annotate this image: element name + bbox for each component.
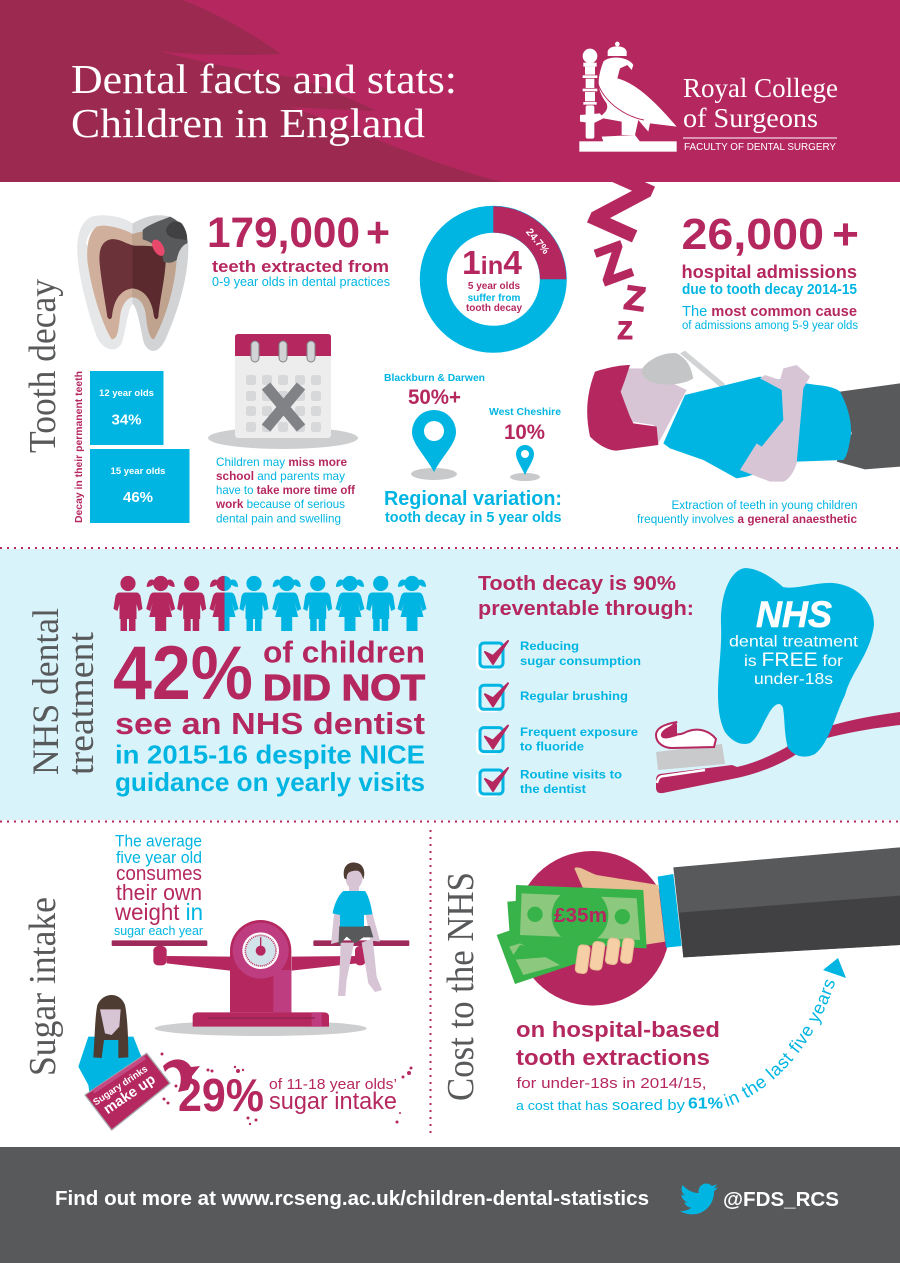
chart: donut 1 in 4: 24.7% bbox=[523, 226, 552, 257]
title: Dental facts and stats: bbox=[71, 56, 457, 102]
stat: 42% did not see an NHS dentist: 42% bbox=[113, 631, 253, 716]
heading: tooth decay: Tooth decay bbox=[22, 279, 64, 453]
list: prevention checklist: Regular brushing bbox=[520, 689, 628, 703]
list: prevention checklist: Frequent exposure bbox=[520, 725, 638, 739]
stat: 42% did not see an NHS dentist bbox=[113, 631, 425, 797]
stat: 29% of sugar intake bbox=[178, 1069, 397, 1121]
list: prevention checklist: the dentist bbox=[520, 782, 586, 796]
text: own weight in sugar: The average bbox=[115, 832, 202, 850]
stat: 26,000+ hospital admissions: due to tooth decay 2014-15 bbox=[682, 282, 857, 298]
heading: cost to the NHS: Cost to the NHS bbox=[440, 872, 482, 1101]
chart: donut 1 in 4 bbox=[433, 206, 566, 339]
curved text: cost soared by 61%: 61% bbox=[688, 1096, 723, 1112]
decoration: sleeping Zs: Z bbox=[622, 279, 648, 319]
chart: decay bars by age bbox=[74, 371, 190, 523]
chart: decay bars by age: 15 year olds bbox=[111, 466, 165, 477]
heading: sugar intake: Sugar intake bbox=[22, 897, 64, 1076]
stat: 42% did not see an NHS dentist: guidance on yearly visits bbox=[115, 767, 425, 797]
stat: 26,000+ hospital admissions: hospital admissions bbox=[682, 262, 857, 282]
heading: 90% preventable: Tooth decay is 90% bbox=[478, 573, 676, 595]
chart: decay bars by age: 46% bbox=[123, 489, 153, 506]
list: prevention checklist: sugar consumption bbox=[520, 654, 641, 668]
stat: 179,000+ teeth extracted: + bbox=[366, 209, 390, 257]
logo: Royal College of Surgeons crest: Royal College bbox=[683, 73, 838, 103]
text: children miss school: dental pain and swelling bbox=[216, 512, 341, 526]
text: own weight in sugar: sugar each year bbox=[114, 923, 204, 938]
illustration: weighing scale bbox=[112, 920, 409, 1036]
stat: 29% of sugar intake: 29% bbox=[178, 1069, 264, 1121]
stat: 42% did not see an NHS dentist: in 2015-16 despite NICE bbox=[115, 740, 425, 770]
caption: general anaesthetic bbox=[637, 500, 858, 526]
heading: NHS dental treatment bbox=[26, 608, 102, 775]
curved text: cost soared by 61%: in the last five years bbox=[724, 980, 835, 1107]
callout: NHS treatment free tooth: dental treatment bbox=[729, 634, 859, 650]
stat: 29% of sugar intake: of 11-18 year olds’ bbox=[269, 1077, 397, 1093]
stat: 26,000+ hospital admissions: of admissions among 5-9 year olds bbox=[682, 320, 858, 332]
stat: 179,000+ teeth extracted bbox=[207, 209, 390, 289]
chart: donut 1 in 4: tooth decay bbox=[466, 303, 522, 314]
callout: NHS treatment free tooth bbox=[718, 568, 874, 757]
text: own weight in sugar: consumes bbox=[116, 863, 202, 885]
list: prevention checklist: Routine visits to bbox=[520, 768, 622, 782]
text: children miss school bbox=[215, 455, 355, 526]
callout: NHS treatment free tooth: under-18s bbox=[754, 671, 833, 688]
decoration: sleeping Zs: Z bbox=[588, 231, 638, 297]
text: children miss school: school and parents may bbox=[216, 469, 345, 483]
icon: toothbrush bbox=[656, 712, 900, 793]
decoration: liquid splash and bubbles bbox=[160, 1052, 412, 1125]
chart: regional variation pins bbox=[384, 372, 562, 526]
panel: sugar intake section bbox=[22, 832, 412, 1130]
chart: regional variation pins: Blackburn & Darwen bbox=[384, 372, 485, 384]
caption: general anaesthetic: Extraction of teeth in young children bbox=[672, 500, 858, 512]
chart: regional variation pins: 10% bbox=[504, 421, 545, 444]
chart: regional variation pins: tooth decay in 5 year olds bbox=[385, 510, 562, 526]
stat: 26,000+ hospital admissions bbox=[682, 210, 859, 332]
text: find out more: Find out more at www.rcseng.ac.uk/children-dental-statistics bbox=[55, 1188, 649, 1210]
list: prevention checklist bbox=[476, 639, 641, 797]
text: children miss school: work because of serious bbox=[215, 497, 345, 511]
chart: regional variation pins: Regional variation: bbox=[384, 488, 562, 510]
list: prevention checklist: to fluoride bbox=[520, 740, 584, 754]
icon: twitter bird bbox=[680, 1184, 718, 1214]
stat: 42% did not see an NHS dentist: of children bbox=[263, 634, 425, 670]
decoration: sleeping Zs: Z bbox=[617, 317, 633, 345]
illustration: seated boy bbox=[331, 863, 382, 996]
stat: 42% did not see an NHS dentist: see an NHS dentist bbox=[115, 707, 425, 741]
heading: NHS dental treatment: treatment bbox=[61, 631, 102, 775]
text: children miss school: Children may miss more bbox=[216, 455, 347, 469]
logo: Royal College of Surgeons crest bbox=[579, 42, 838, 164]
text: own weight in sugar bbox=[114, 832, 204, 938]
panel: footer bbox=[0, 1147, 900, 1263]
label: £35m: £35m bbox=[554, 905, 607, 927]
text: own weight in sugar: their own bbox=[116, 880, 202, 905]
curved text: cost soared by 61%: soared by bbox=[612, 1098, 686, 1114]
chart: regional variation pins: West Cheshire bbox=[489, 407, 561, 418]
title: Children in England bbox=[71, 100, 425, 146]
text: hospital-based tooth extractions bbox=[516, 1017, 720, 1092]
title bbox=[71, 56, 457, 146]
list: prevention checklist: Reducing bbox=[520, 639, 579, 653]
chart: ten children pictogram bbox=[114, 576, 426, 631]
stat: 29% of sugar intake: sugar intake bbox=[269, 1088, 397, 1115]
label: sugary drinks make up: make up bbox=[101, 1072, 159, 1118]
chart: decay bars by age: Decay in their permanent teeth bbox=[74, 371, 85, 523]
curved text: cost soared by 61%: a cost that has bbox=[516, 1099, 608, 1113]
chart: regional variation pins: 50%+ bbox=[408, 386, 461, 409]
illustration: anaesthetised patient bbox=[587, 351, 900, 482]
chart: decay bars by age: 12 year olds bbox=[99, 388, 154, 399]
chart: donut 1 in 4: 1in4 bbox=[462, 244, 523, 281]
illustration: hand with £35m banknotes bbox=[497, 847, 900, 1006]
arrow: upward trend bbox=[823, 958, 846, 978]
heading: 90% preventable: preventable through: bbox=[478, 598, 694, 620]
illustration: girl with sugary drink can bbox=[78, 995, 170, 1130]
chart: donut 1 in 4: 5 year olds bbox=[468, 281, 521, 292]
stat: 26,000+ hospital admissions: 26,000 bbox=[682, 210, 824, 259]
stat: 26,000+ hospital admissions: The most common cause bbox=[682, 304, 857, 320]
panel: header bbox=[0, 0, 900, 182]
callout: NHS treatment free tooth: is FREE for bbox=[744, 650, 843, 671]
icon: calendar with cross bbox=[208, 334, 358, 449]
panel: cost to the NHS section bbox=[440, 847, 900, 1114]
stat: 179,000+ teeth extracted: 0-9 year olds in dental practices bbox=[212, 275, 390, 289]
text: twitter handle: @FDS_RCS bbox=[723, 1189, 839, 1211]
text: own weight in sugar: five year old bbox=[116, 848, 202, 867]
chart: decay bars by age: 34% bbox=[111, 412, 142, 428]
text: hospital-based tooth extractions: tooth extractions bbox=[516, 1045, 710, 1070]
caption: general anaesthetic: frequently involves a general anaesthetic bbox=[637, 514, 858, 526]
heading: 90% preventable bbox=[478, 573, 694, 620]
chart: donut 1 in 4: suffer from bbox=[468, 293, 520, 304]
logo: Royal College of Surgeons crest: of Surgeons bbox=[683, 103, 818, 133]
text: hospital-based tooth extractions: for under-18s in 2014/15, bbox=[516, 1076, 706, 1092]
panel: NHS dental treatment section bbox=[0, 548, 900, 822]
stat: 179,000+ teeth extracted: 179,000 bbox=[207, 209, 360, 257]
text: own weight in sugar: weight in bbox=[114, 899, 203, 925]
label: sugary drinks make up: Sugary drinks bbox=[91, 1064, 150, 1108]
logo: Royal College of Surgeons crest: FACULTY OF DENTAL SURGERY bbox=[684, 141, 836, 153]
text: hospital-based tooth extractions: on hospital-based bbox=[516, 1017, 720, 1042]
decoration: sleeping Zs: Z bbox=[580, 154, 663, 257]
text: children miss school: have to take more time off bbox=[216, 483, 355, 497]
divider: vertical dots bbox=[430, 830, 432, 1138]
stat: 26,000+ hospital admissions: + bbox=[832, 210, 859, 259]
decoration: sleeping Zs bbox=[580, 154, 663, 345]
heading: NHS dental treatment: NHS dental bbox=[26, 608, 67, 775]
callout: NHS treatment free tooth: NHS bbox=[756, 594, 832, 635]
panel: tooth decay section bbox=[22, 154, 900, 526]
icon: decayed tooth bbox=[77, 215, 188, 351]
stat: 179,000+ teeth extracted: teeth extracted from bbox=[212, 257, 389, 276]
curved text: cost soared by 61% bbox=[516, 980, 835, 1114]
stat: 42% did not see an NHS dentist: DID NOT bbox=[263, 667, 425, 708]
